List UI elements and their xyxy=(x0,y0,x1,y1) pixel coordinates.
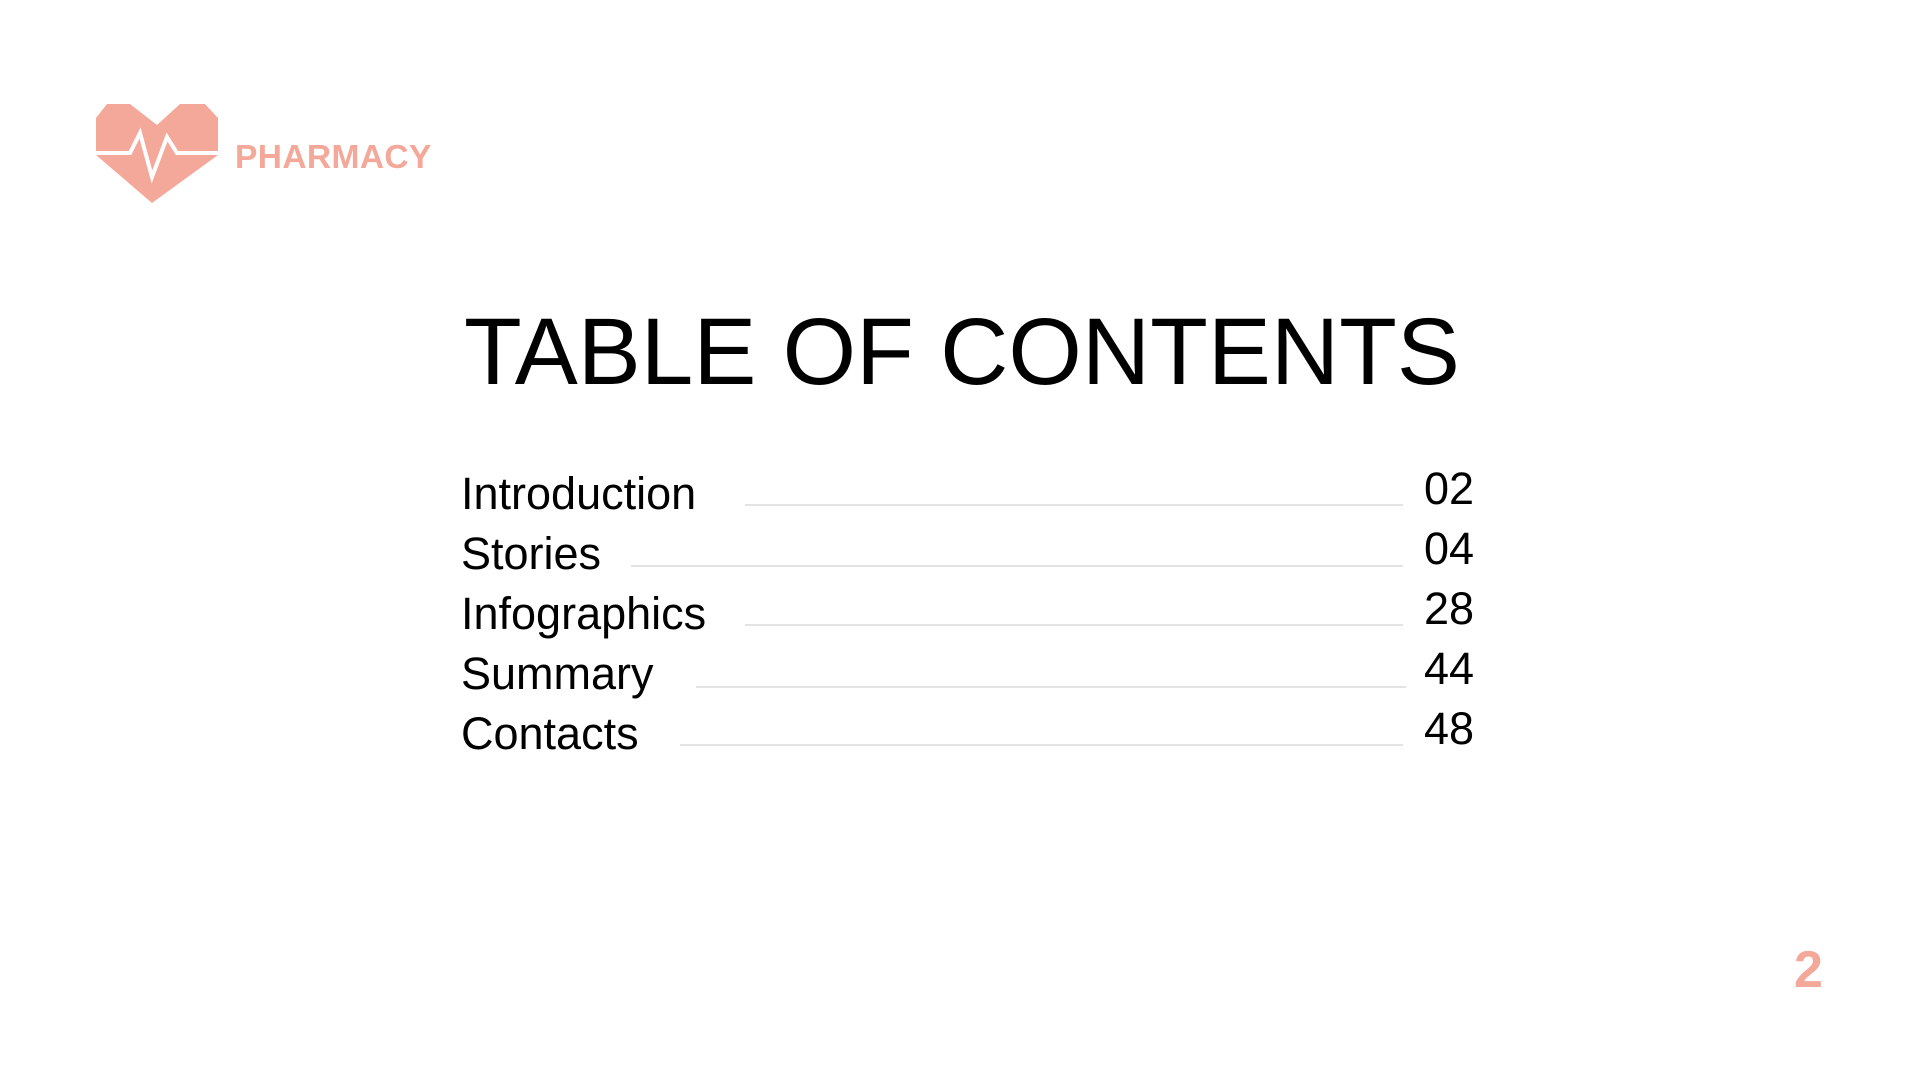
page number: 2 xyxy=(1794,941,1823,999)
logo text: PHARMACY xyxy=(235,139,432,176)
toc list xyxy=(461,463,1474,759)
toc row: Stories: 04 xyxy=(1424,523,1474,574)
toc row: Stories: Stories xyxy=(461,528,601,579)
toc row: Infographics: 28 xyxy=(1424,583,1474,634)
toc row: Infographics: Infographics xyxy=(461,588,706,639)
toc row: Contacts: Contacts xyxy=(461,708,639,759)
toc row: Summary: 44 xyxy=(1424,643,1474,694)
toc row: Introduction: Introduction xyxy=(461,468,696,519)
logo xyxy=(96,104,432,203)
title: TABLE OF CONTENTS xyxy=(464,299,1460,405)
toc row: Contacts: 48 xyxy=(1424,703,1474,754)
toc row: Summary: Summary xyxy=(461,648,654,699)
toc row: Introduction: 02 xyxy=(1424,463,1474,514)
icon: heart with ecg xyxy=(96,104,218,203)
